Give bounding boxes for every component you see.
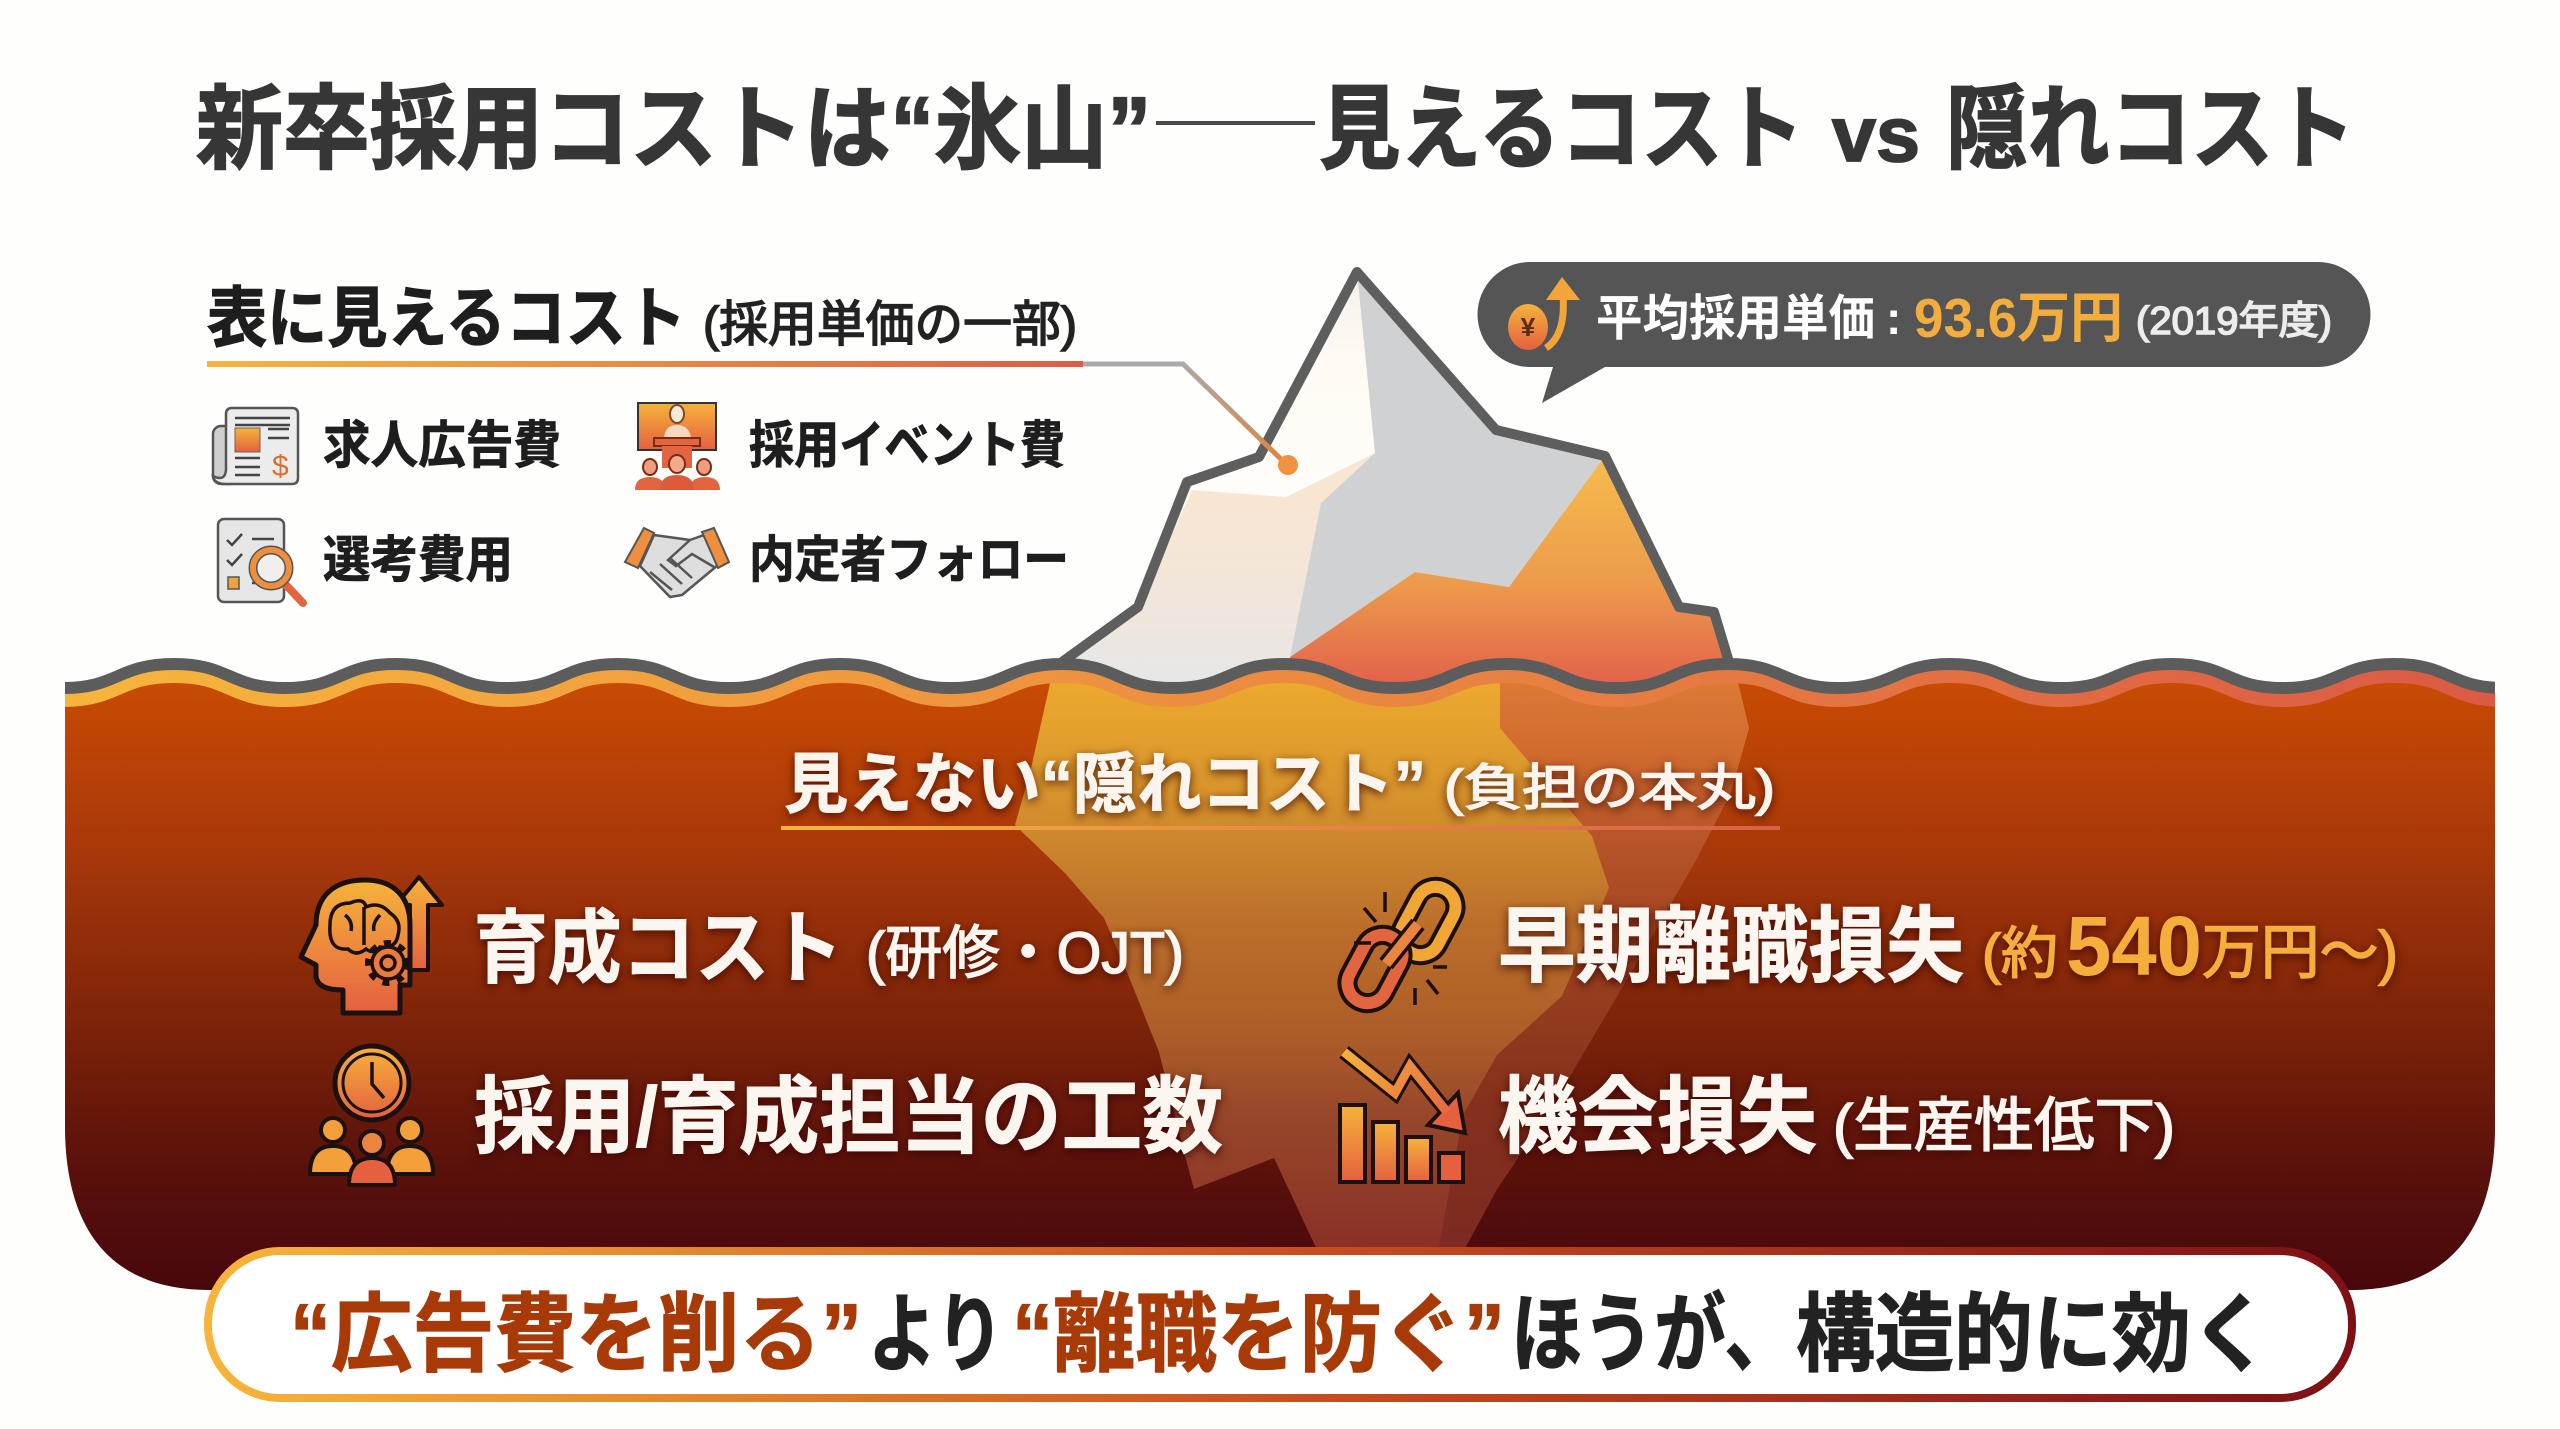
submerged iceberg xyxy=(1015,675,1749,1252)
label: training cost xyxy=(474,904,1184,993)
banner phrase 1: “広告費を削る” xyxy=(290,1287,862,1383)
facet: gray face xyxy=(1290,272,1605,657)
label: average unit cost: 平均採用単価 xyxy=(1596,292,1875,346)
heading note: (採用単価の一部) xyxy=(703,298,1077,352)
title xyxy=(196,79,2355,181)
label: recruiter and trainer workload: 採用/育成担当の工数 xyxy=(474,1070,1223,1164)
panel: underwater hidden costs xyxy=(63,664,2505,1300)
icon: head with brain, gear and arrow xyxy=(301,877,442,1013)
banner particle: より xyxy=(868,1287,1004,1383)
panel: visible costs xyxy=(207,281,1083,603)
opportunity loss main: 機会損失 xyxy=(1498,1070,1817,1164)
icon: recruiting event xyxy=(635,403,720,490)
value: 93.6万円: 93.6万円 xyxy=(1914,287,2123,349)
label: recruiting event cost: 採用イベント費 xyxy=(749,417,1065,474)
value 540: 540 xyxy=(2066,899,2202,993)
banner phrase 2: “離職を防ぐ” xyxy=(1012,1287,1505,1383)
bubble shape xyxy=(1478,262,2370,403)
label: offer follow-up: 内定者フォロー xyxy=(749,532,1069,588)
title part 1: 新卒採用コストは“氷山” xyxy=(196,79,1151,181)
title part 3: 隠れコスト xyxy=(1946,79,2355,181)
banner phrase 4: 構造的に効く xyxy=(1796,1287,2270,1383)
iceberg outline xyxy=(1062,272,1729,662)
water surface bands xyxy=(63,664,2505,700)
icon: clock with people xyxy=(310,1046,433,1185)
note: fiscal year: (2019年度) xyxy=(2136,300,2332,343)
callout line to iceberg xyxy=(1083,364,1298,475)
title vs: vs xyxy=(1832,90,1920,178)
icon: coin with rising arrow xyxy=(1508,277,1580,350)
facet: snow cap xyxy=(1192,272,1375,497)
icon: screening checklist xyxy=(218,519,303,603)
connector line xyxy=(1083,364,1287,465)
万円 and closing: 万円～) xyxy=(2202,919,2398,986)
training cost note: (研修・OJT) xyxy=(866,921,1184,986)
callout: average hiring cost bubble xyxy=(1478,262,2370,403)
heading underline xyxy=(781,826,1780,830)
facet: gold xyxy=(1015,683,1595,874)
training cost main: 育成コスト xyxy=(474,904,843,993)
connector dot xyxy=(1278,455,1298,475)
icon: newspaper xyxy=(213,408,298,484)
title dash xyxy=(1156,121,1315,125)
icon: coin with rising arrow: ¥ xyxy=(1521,312,1536,342)
banner frame xyxy=(208,1251,2352,1398)
heading main text: 見えない“隠れコスト” xyxy=(784,747,1426,821)
heading: hidden costs xyxy=(784,747,1775,821)
colon: : xyxy=(1886,292,1901,344)
icon: broken chain xyxy=(1340,880,1463,1010)
label: job ads: 求人広告費 xyxy=(323,417,561,474)
ocean body xyxy=(63,664,2505,1300)
heading note text: (負担の本丸) xyxy=(1444,760,1775,816)
takeaway banner xyxy=(208,1251,2352,1398)
opportunity loss note: (生産性低下) xyxy=(1833,1093,2175,1159)
iceberg above water xyxy=(1050,272,1740,700)
icon: newspaper: $ xyxy=(272,450,289,483)
icon: handshake xyxy=(625,528,729,597)
heading underline xyxy=(207,361,1083,367)
label: early turnover loss xyxy=(1498,899,2398,993)
facet: right xyxy=(1438,675,1749,1252)
facet: cream left face xyxy=(1050,453,1375,700)
title part 2: 見えるコスト xyxy=(1319,79,1804,181)
submerged silhouette xyxy=(1015,675,1749,1252)
label: screening cost: 選考費用 xyxy=(323,532,513,588)
banner phrase 3: ほうが、 xyxy=(1511,1287,1796,1383)
heading: visible costs: 表に見えるコスト xyxy=(207,281,686,355)
early turnover main: 早期離職損失 xyxy=(1498,900,1964,993)
opening and 約: (約 xyxy=(1982,922,2058,985)
label: opportunity loss xyxy=(1498,1070,2175,1164)
facet: orange face xyxy=(1290,456,1740,700)
icon: falling chart xyxy=(1340,1052,1465,1182)
